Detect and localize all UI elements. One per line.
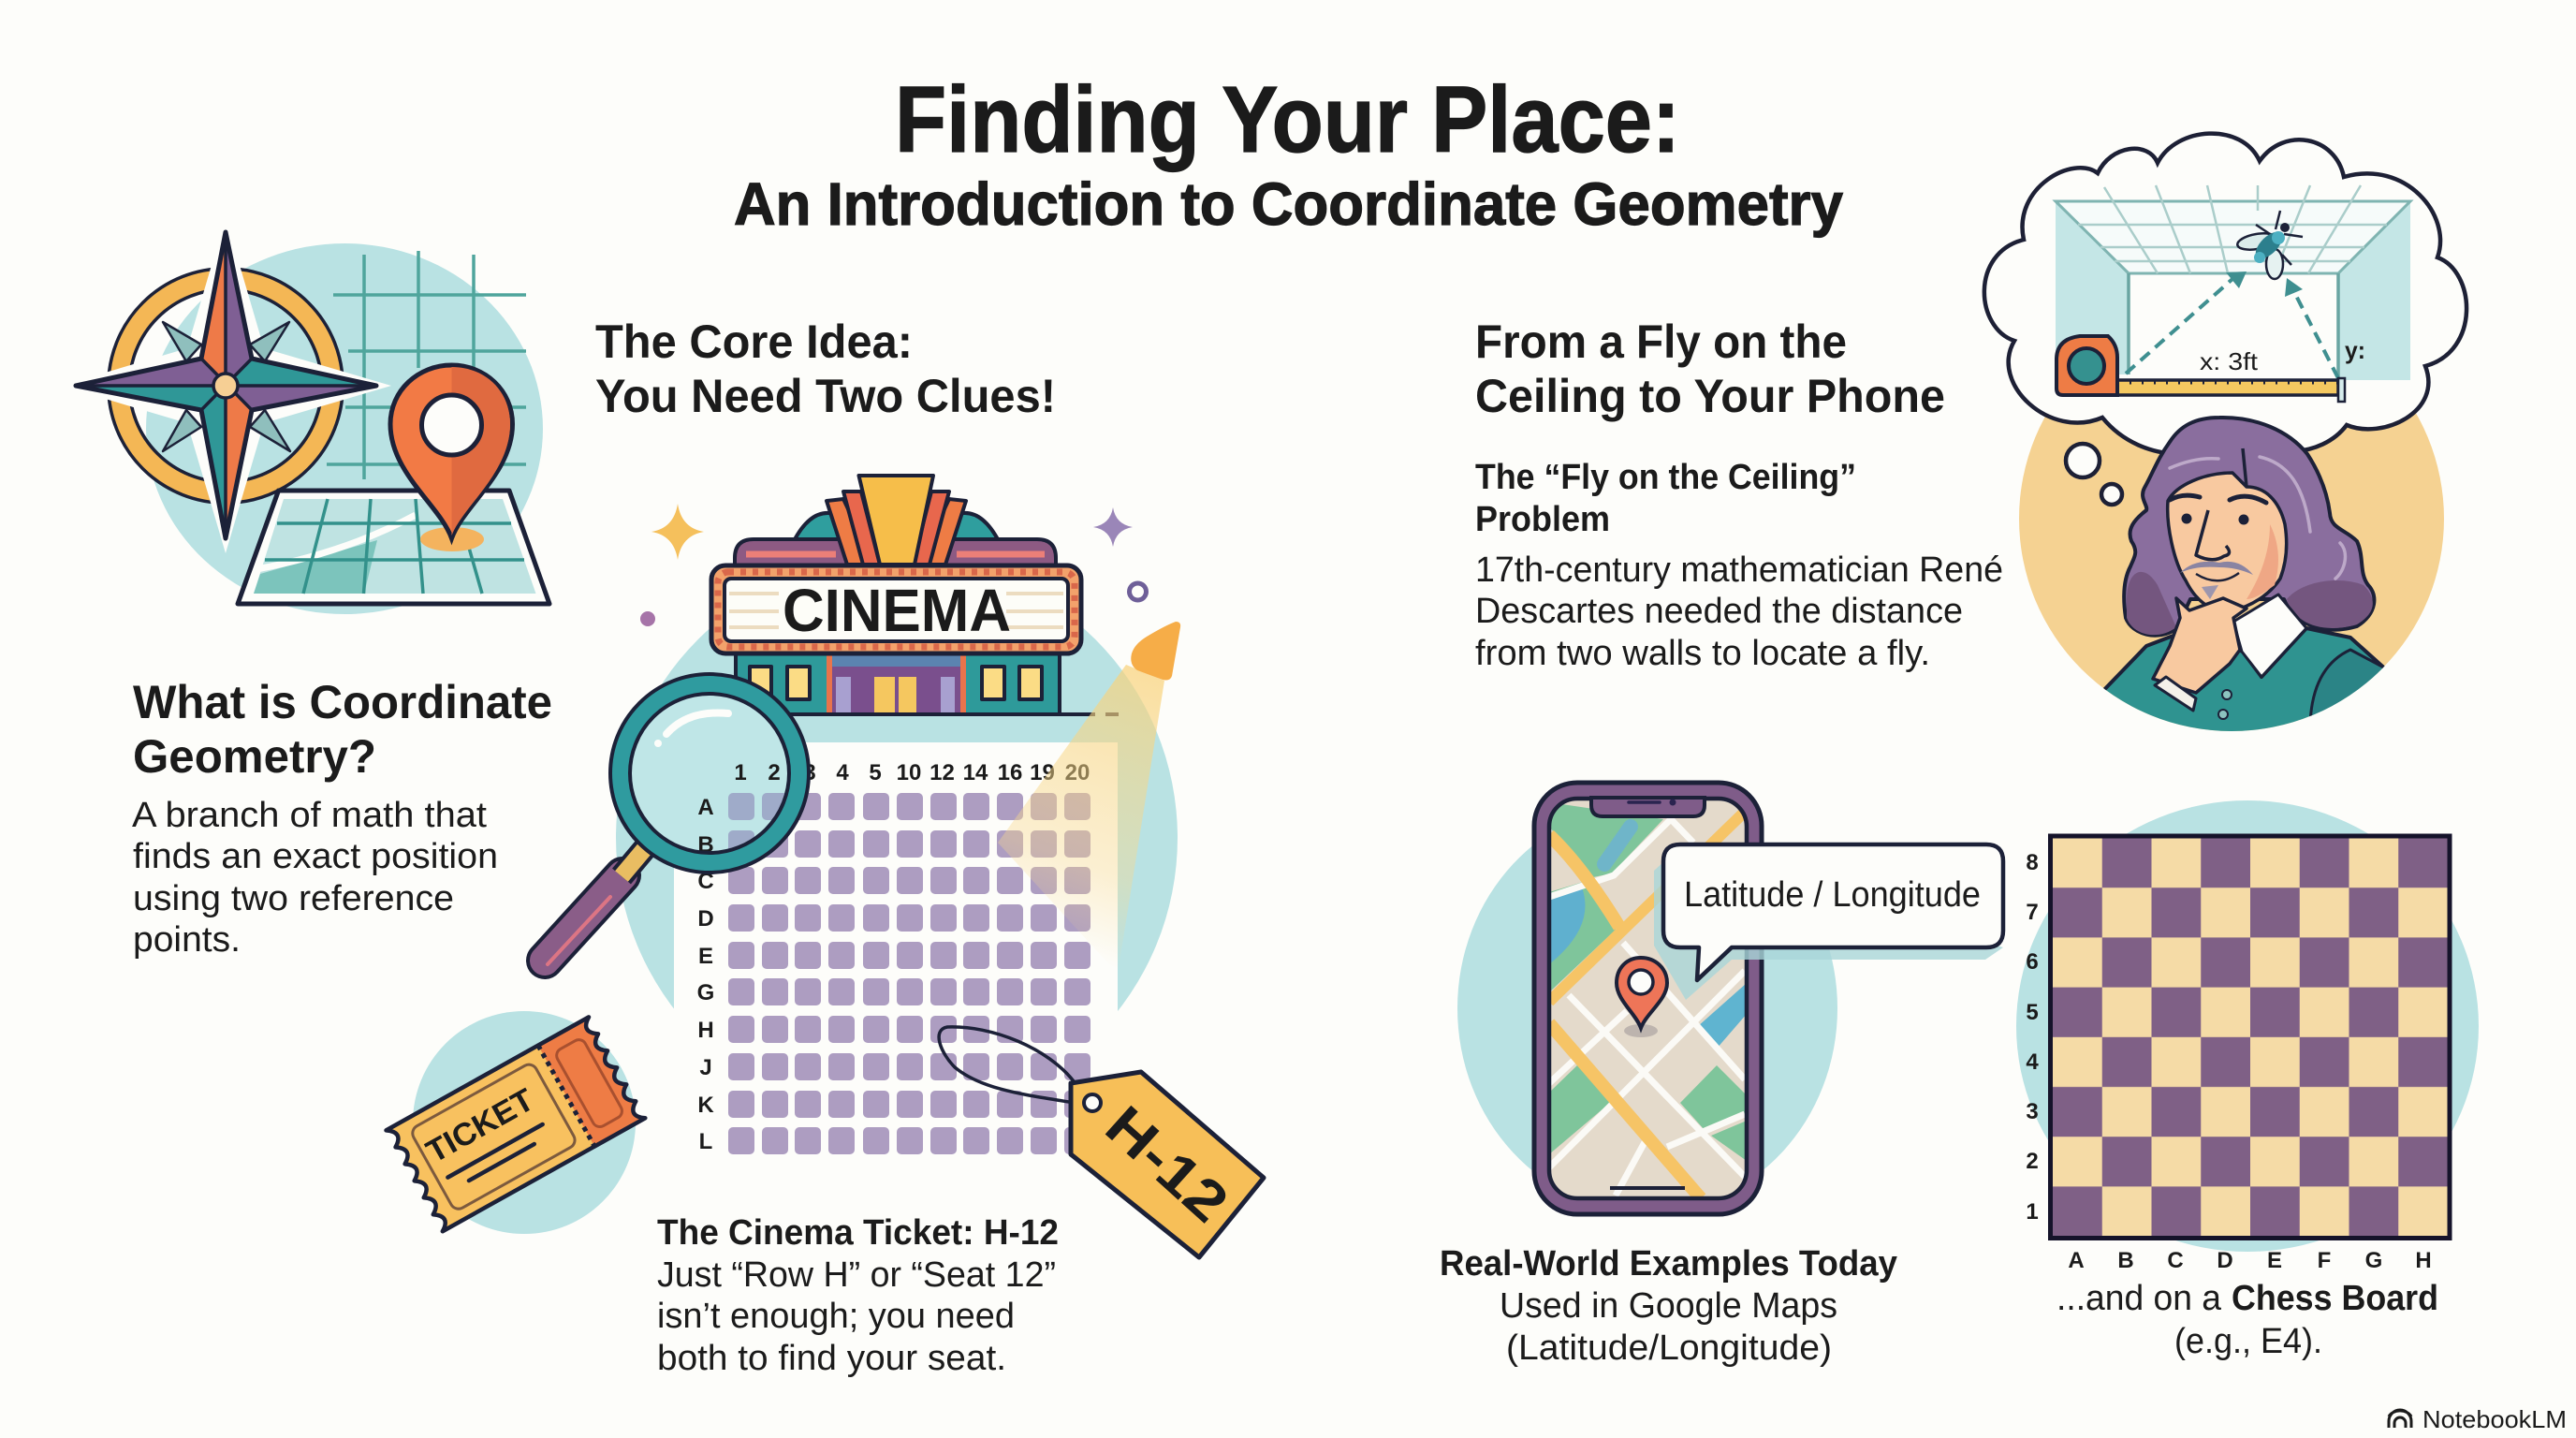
sparkles xyxy=(640,504,1146,626)
text block: real-world examples: (Latitude/Longitude) xyxy=(1506,1328,1832,1368)
text block: from a fly on the ceiling: The “Fly on the Ceiling” xyxy=(1475,458,1856,497)
text block: what is coordinate geometry xyxy=(132,676,552,960)
text block: the cinema ticket: both to find your seat. xyxy=(657,1339,1006,1378)
text block: from a fly on the ceiling: From a Fly on the xyxy=(1475,315,1847,368)
background circle behind Descartes xyxy=(2019,306,2444,731)
text block: from a fly on the ceiling: 17th-century mathematician René xyxy=(1475,550,2003,590)
icon: magnifying glass xyxy=(545,683,799,964)
seat map: G xyxy=(697,980,714,1005)
seat map: B xyxy=(697,832,714,858)
thought cloud: x: 3ft xyxy=(2200,347,2259,375)
text block: from a fly on the ceiling: Ceiling to Your Phone xyxy=(1475,370,1945,422)
text block: from a fly on the ceiling: from two walls to locate a fly. xyxy=(1475,634,1930,673)
room xyxy=(2056,185,2410,380)
seat map: E xyxy=(698,944,713,969)
chart: chess board: 4 xyxy=(2026,1049,2039,1075)
text block: real-world examples: Real-World Examples Today xyxy=(1440,1244,1897,1284)
seat map: L xyxy=(699,1129,712,1154)
text block: from a fly on the ceiling: Problem xyxy=(1475,500,1610,539)
text block: real-world examples: Used in Google Maps xyxy=(1500,1286,1837,1326)
text block: the cinema ticket: isn’t enough; you need xyxy=(657,1297,1015,1336)
text block: chess board caption: Chess Board xyxy=(2232,1279,2438,1318)
title: An Introduction to Coordinate Geometry xyxy=(734,170,1843,238)
title xyxy=(734,67,1843,238)
text block: real-world examples xyxy=(1440,1244,1897,1368)
chart: chess board: B xyxy=(2117,1248,2134,1273)
text block: the cinema ticket: Just “Row H” or “Seat 12” xyxy=(657,1255,1056,1295)
coat xyxy=(2103,626,2385,731)
chart: chess board: 5 xyxy=(2026,1000,2039,1025)
seat map: 5 xyxy=(869,760,882,785)
illustration: Descartes portrait xyxy=(2097,418,2396,740)
seat map: 12 xyxy=(929,760,955,785)
chart: chess board: 6 xyxy=(2026,949,2039,975)
seat map: 3 xyxy=(803,760,816,785)
text block: what is coordinate geometry: A branch of math that xyxy=(132,796,487,835)
text block: what is coordinate geometry: Geometry? xyxy=(133,730,376,783)
seat map: J xyxy=(699,1055,712,1080)
thought cloud xyxy=(1984,134,2466,505)
chart: chess board: H xyxy=(2415,1248,2432,1273)
heading: the core idea: You Need Two Clues! xyxy=(595,370,1056,422)
chart: chess board: A xyxy=(2068,1248,2085,1273)
seat map: C xyxy=(697,869,714,894)
callout: latitude / longitude xyxy=(1654,843,2003,1000)
text block: what is coordinate geometry: points. xyxy=(133,920,241,960)
chart: chess board: G xyxy=(2365,1248,2382,1273)
seat map: K xyxy=(697,1093,714,1118)
seat map: 4 xyxy=(836,760,849,785)
icon: ticket: TICKET xyxy=(420,1082,540,1170)
callout: latitude / longitude: Latitude / Longitude xyxy=(1684,875,1981,915)
chart: chess board: 2 xyxy=(2026,1149,2039,1174)
seats seen through the lens xyxy=(698,764,784,851)
seats seen through the lens: A xyxy=(697,795,714,820)
illustration: cinema and seat map xyxy=(545,476,1264,1257)
icon: compass, pin and map xyxy=(61,217,549,614)
title: Finding Your Place: xyxy=(895,67,1680,172)
map pin xyxy=(1617,958,1667,1037)
cinema building xyxy=(711,476,1119,714)
heading: the core idea xyxy=(595,315,1056,422)
text block: from a fly on the ceiling: Descartes needed the distance xyxy=(1475,592,1963,631)
logo: NotebookLM: NotebookLM xyxy=(2422,1405,2567,1433)
text block: chess board caption: (e.g., E4). xyxy=(2174,1322,2322,1361)
text block: what is coordinate geometry: using two reference xyxy=(133,879,454,918)
thought cloud: y: xyxy=(2345,336,2365,364)
seat map: 2 xyxy=(768,760,781,785)
chart: chess board: E xyxy=(2267,1248,2282,1273)
facial features xyxy=(2170,495,2278,599)
face xyxy=(2168,473,2287,610)
spotlight xyxy=(998,622,1180,974)
chart: chess board: 8 xyxy=(2026,850,2039,875)
hand xyxy=(2153,598,2247,711)
text block: chess board caption xyxy=(2056,1279,2438,1361)
text block: what is coordinate geometry: What is Coordinate xyxy=(133,676,552,728)
seat map: 14 xyxy=(963,760,988,785)
hair shading xyxy=(2127,457,2373,635)
seats seen through the lens: 2 xyxy=(768,760,781,785)
seat map: H xyxy=(697,1018,714,1043)
seat map: D xyxy=(697,906,714,932)
collar xyxy=(2233,594,2306,677)
phone body xyxy=(1534,783,1762,1214)
icon: ticket xyxy=(387,1011,645,1234)
chart: chess board: C xyxy=(2167,1248,2184,1273)
seat map: 16 xyxy=(998,760,1022,785)
hair xyxy=(2124,418,2374,636)
tag: H-12: H-12 xyxy=(1094,1093,1240,1234)
dashed arrows xyxy=(2126,271,2338,378)
seats seen through the lens: 1 xyxy=(734,760,747,785)
cinema building: CINEMA xyxy=(783,577,1011,644)
seat map: 20 xyxy=(1065,760,1090,785)
seat map: 19 xyxy=(1030,760,1055,785)
chart: chess board xyxy=(2016,800,2479,1273)
text block: the cinema ticket xyxy=(657,1213,1059,1378)
map screen xyxy=(1549,799,1747,1198)
text block: what is coordinate geometry: finds an exact position xyxy=(133,837,498,876)
icon: fly xyxy=(2236,211,2303,279)
text block: from a fly on the ceiling xyxy=(1475,315,2003,673)
chart: chess board: D xyxy=(2217,1248,2233,1273)
seat map: 10 xyxy=(897,760,921,785)
text block: the cinema ticket: The Cinema Ticket: H-12 xyxy=(657,1213,1059,1253)
tag: H-12 xyxy=(939,1027,1264,1257)
seat map: A xyxy=(697,795,714,820)
chart: chess board: 1 xyxy=(2026,1199,2039,1225)
illustration: phone with map xyxy=(1457,783,2003,1214)
text block: chess board caption: ...and on a xyxy=(2056,1279,2222,1318)
seats seen through the lens: B xyxy=(697,832,714,858)
icon: tape measure xyxy=(2056,336,2345,402)
chart: chess board: 3 xyxy=(2026,1099,2039,1124)
chart: chess board: F xyxy=(2318,1248,2331,1273)
seat map xyxy=(697,760,1090,1154)
seat map: 1 xyxy=(734,760,747,785)
heading: the core idea: The Core Idea: xyxy=(595,315,913,368)
chart: chess board: 7 xyxy=(2026,900,2039,925)
buttons xyxy=(2218,690,2232,719)
